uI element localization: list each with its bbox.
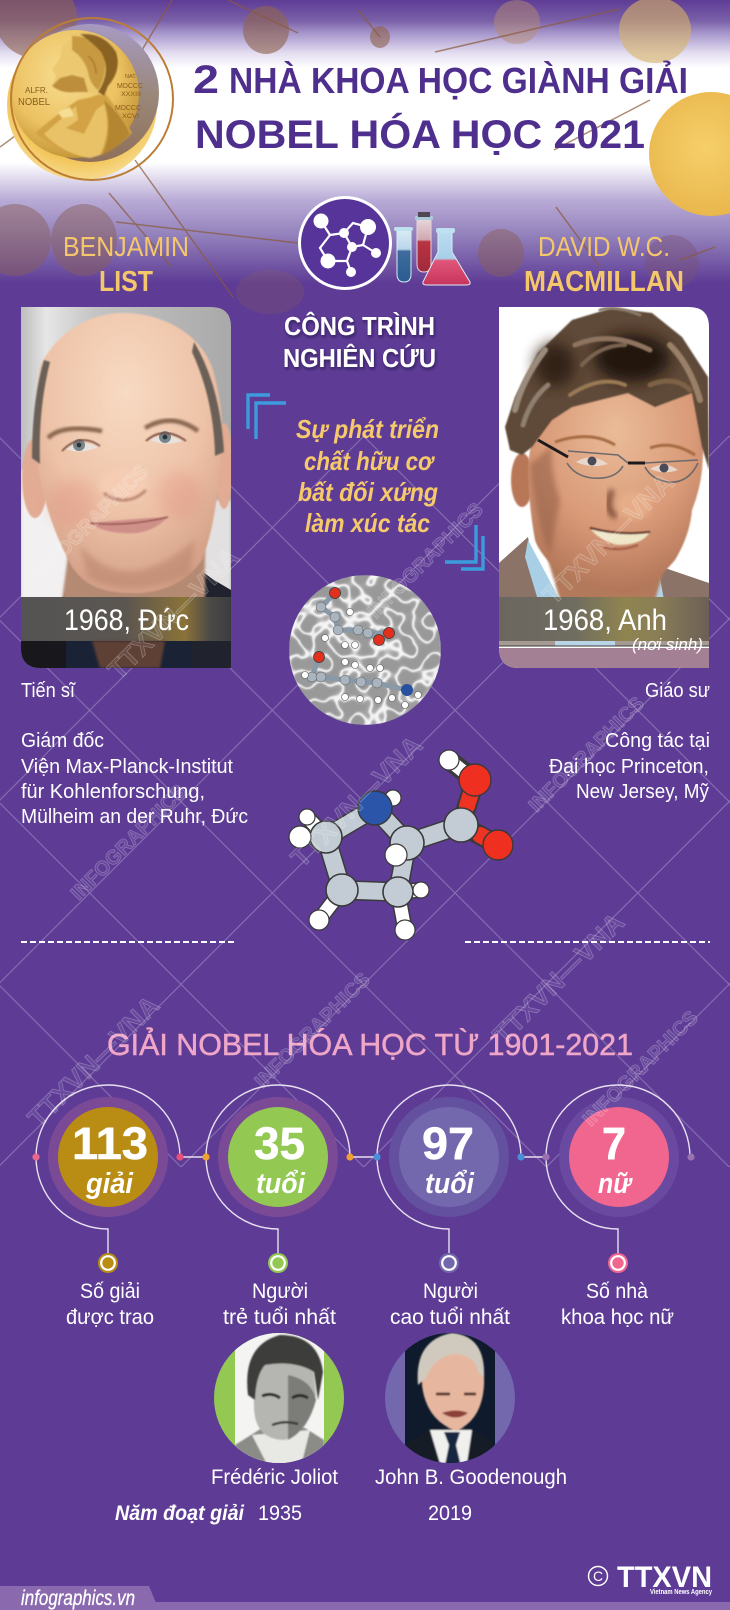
ball-and-stick molecule [289,750,513,940]
career text: Benjamin List: für Kohlenforschung, [21,781,205,803]
stat: 113 prizes: giải [85,1168,134,1200]
career text: Benjamin List: Giám đốc [21,730,104,752]
nitrogen atom [358,791,392,825]
watermarks: TTXVN—VNA [22,990,165,1133]
medal inscription: MDCCC [117,83,143,90]
neck [62,550,205,600]
stat: 7 women: nữ [598,1168,633,1200]
career text: Benjamin List: Viện Max-Planck-Institut [21,756,233,778]
name: Benjamin List: BENJAMIN [63,231,189,262]
watermarks: INFOGRAPHICS [67,781,191,905]
watermarks: INFOGRAPHICS [29,461,153,585]
stat labels: trẻ tuổi nhất [223,1306,336,1329]
date strip [21,597,231,668]
molecule sphere [289,575,441,725]
photo: David MacMillan [499,307,709,668]
research topic text: Sự phát triển [296,414,439,444]
connectors [180,1156,545,1158]
portrait: John B. Goodenough [385,1330,515,1470]
neck [546,558,664,597]
stat labels: Số nhà [586,1280,648,1303]
watermarks: TTXVN—VNA [102,542,245,685]
name: Benjamin List [63,231,189,298]
face [528,392,704,578]
carbon atoms [310,808,478,907]
stat: 97 years: tuổi [425,1168,475,1200]
research topic text: bất đối xứng [298,477,438,507]
watermarks: TTXVN—VNA [487,907,630,1050]
medal portrait [35,33,132,158]
watermarks: INFOGRAPHICS [364,499,488,623]
career text: David MacMillan: Công tác tại [605,730,710,752]
logo: TTXVN: Vietnam News Agency [650,1589,712,1596]
cheeks [50,471,202,527]
title: NOBEL HÓA HỌC 2021 [195,111,645,157]
stat: 7 women: 7 [602,1118,626,1169]
clothes [21,570,231,668]
stat labels: Người [423,1280,478,1303]
eyes [555,437,695,472]
heading: research work: CÔNG TRÌNH [284,311,435,341]
footer band: infographics.vn [21,1587,135,1610]
name: Frédéric Joliot: Frédéric Joliot [211,1466,338,1489]
award year label: Năm đoạt giải [115,1502,245,1525]
stat: 97 years: 97 [422,1118,474,1169]
research topic text: làm xúc tác [305,508,430,538]
mouth [590,528,650,549]
career text: David MacMillan [549,680,710,803]
medal inscription: NOBEL [18,97,50,108]
research topic text: chất hữu cơ [304,446,435,476]
face shadow [530,445,560,555]
oxygen atoms [459,764,513,860]
watermarks: INFOGRAPHICS [525,693,649,817]
hydrogen atoms [289,750,459,940]
logo: TTXVN: C [593,1568,603,1584]
medal inscription: NAT. [125,74,137,80]
mouth [90,517,168,533]
glasses [538,440,698,482]
jaw shadow [80,540,195,588]
career text: David MacMillan: Giáo sư [645,680,710,702]
stat: 35 years: 35 [254,1118,305,1169]
career text: David MacMillan: Đại học Princeton, [549,756,709,778]
career text: Benjamin List [21,680,248,828]
blazer and shirt [499,537,709,600]
nose [609,490,651,519]
stat: 113 prizes [32,1085,184,1273]
medal [7,18,173,180]
stat labels: khoa học nữ [561,1306,674,1329]
heading: statistics: GIẢI NOBEL HÓA HỌC TỪ 1901-2021 [107,1027,633,1062]
stat: 35 years: tuổi [256,1168,306,1200]
icon: molecule badge [298,196,392,290]
watermarks: INFOGRAPHICS [579,1007,703,1131]
medal inscription: XCVI [122,114,139,120]
dashed divider left [21,941,234,943]
bracket: top left [248,395,286,439]
medal inscription: MDCCC [115,105,141,112]
name: Benjamin List: LIST [99,266,153,298]
stat: 113 prizes: 113 [72,1118,148,1169]
icon: test tubes and flask [394,212,470,285]
ears [22,423,233,518]
portrait: Frédéric Joliot [214,1330,344,1470]
stat labels [66,1280,674,1329]
footer band [0,1586,730,1610]
bonds [300,760,498,930]
birthplace note: (nơi sinh) [632,635,703,654]
stat: 97 years [373,1085,525,1273]
career text: David MacMillan: New Jersey, Mỹ [576,781,709,803]
career text: Benjamin List: Tiến sĩ [21,680,76,702]
medal inscription: ALFR. [25,86,48,95]
watermarks: TTXVN—VNA [537,467,680,610]
heading: research work: NGHIÊN CỨU [283,343,436,373]
title: NHÀ KHOA HỌC GIÀNH GIẢI [229,60,688,101]
photo: Benjamin List [21,307,233,668]
name: David MacMillan: DAVID W.C. [538,231,670,262]
lattice watermark [0,436,730,1167]
dashed divider right [465,941,710,943]
logo: TTXVN: TTXVN [617,1561,712,1594]
head [36,313,222,593]
header band [0,0,730,314]
stat labels: được trao [66,1306,154,1329]
watermarks: TTXVN—VNA [285,730,428,873]
stat labels: cao tuổi nhất [390,1306,510,1329]
name: David MacMillan [524,231,684,298]
bracket: bottom right [445,525,483,569]
watermarks [22,461,703,1133]
hair [505,308,709,470]
date label: Benjamin List: 1968, Đức [64,604,189,637]
strip and footer band [499,597,709,668]
year: 1935: 1935 [258,1502,302,1525]
stat: 7 women [542,1085,695,1273]
stat: 35 years [202,1085,354,1273]
name: David MacMillan: MACMILLAN [524,266,684,298]
title [193,58,688,157]
title: 2 [193,58,219,102]
brows and eyes [48,421,198,452]
medal inscription: XXXIII [121,92,141,98]
heading: research work [283,311,436,373]
stat labels: Người [252,1280,308,1303]
research topic text [296,414,439,538]
career text: Benjamin List: Mülheim an der Ruhr, Đức [21,806,248,828]
watermarks: INFOGRAPHICS [251,969,375,1093]
ear [511,453,533,507]
stat labels: Số giải [80,1280,140,1303]
year: 2019: 2019 [428,1502,472,1525]
hair sides [32,342,224,464]
date label: David MacMillan: 1968, Anh [543,604,667,637]
medal inscription [18,74,143,120]
name: John B. Goodenough: John B. Goodenough [375,1466,567,1489]
nose [103,488,148,502]
